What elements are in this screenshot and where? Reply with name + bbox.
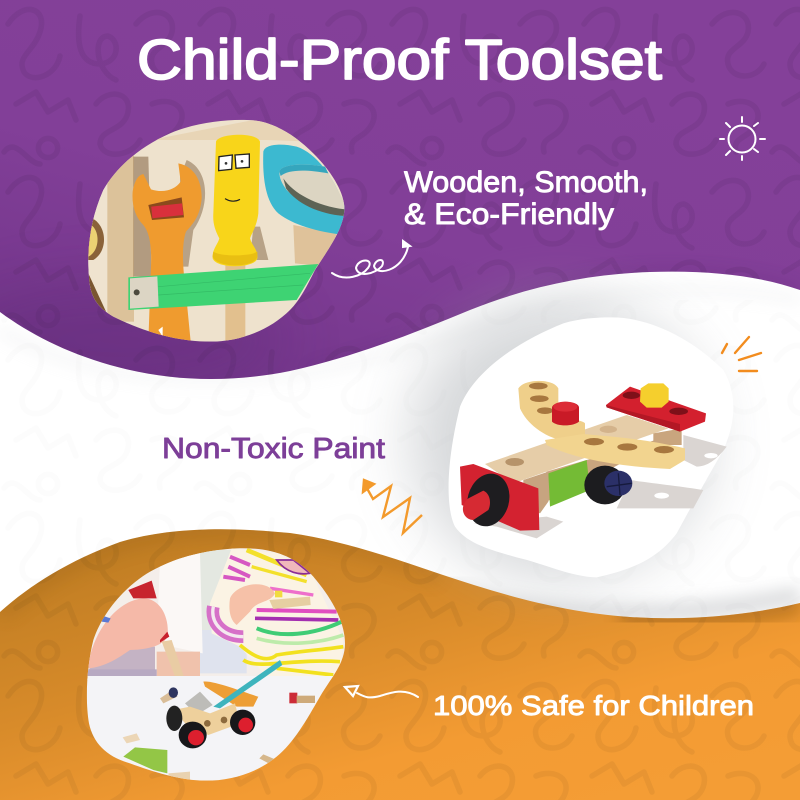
title: Child-Proof Toolset <box>137 28 662 92</box>
left child shirt and arm <box>88 554 202 676</box>
front red plate and wheel <box>460 464 539 531</box>
right child striped sweater <box>210 548 343 677</box>
blue toy saw <box>263 145 345 267</box>
arrow: orange zigzag <box>363 480 422 533</box>
left wooden rail <box>88 155 152 322</box>
icon: orange burst <box>722 337 761 371</box>
text: wooden, smooth, eco-friendly: & Eco-Friendly <box>404 198 614 231</box>
image: children playing with the toy car <box>86 548 345 781</box>
white table <box>86 676 334 781</box>
main wooden body <box>485 415 682 513</box>
panel: orange footer wave <box>0 520 800 800</box>
image: wooden tools in a blob <box>88 120 344 342</box>
arrow: white looping arrow <box>332 241 410 277</box>
red peg <box>552 402 579 425</box>
white blob <box>449 317 733 577</box>
text: wooden, smooth, eco-friendly <box>404 166 648 231</box>
panel: purple header wave <box>0 0 800 400</box>
text: wooden, smooth, eco-friendly: Wooden, Smooth, <box>404 166 648 199</box>
green elastic strap <box>128 264 318 310</box>
shadow of tools <box>180 160 205 267</box>
text: 100% safe for children: 100% Safe for Children <box>433 690 754 721</box>
frame: wooden top rail <box>156 120 300 142</box>
toy car on the table <box>160 660 315 748</box>
text: non-toxic paint: Non-Toxic Paint <box>162 433 385 465</box>
orange wrench <box>132 163 202 342</box>
yellow screwdriver <box>213 135 260 343</box>
image shadow: paint blob <box>410 300 710 580</box>
rear wheel <box>584 466 632 504</box>
icon: sun <box>720 117 765 160</box>
image: wooden toy plane in a blob <box>449 317 733 577</box>
loose blocks <box>123 733 277 782</box>
top red bar with yellow bolt <box>606 383 706 432</box>
room background <box>87 548 345 680</box>
cast shadows <box>473 435 727 538</box>
arrow: white wavy arrow <box>345 686 418 697</box>
yellow curved wings <box>518 381 685 469</box>
